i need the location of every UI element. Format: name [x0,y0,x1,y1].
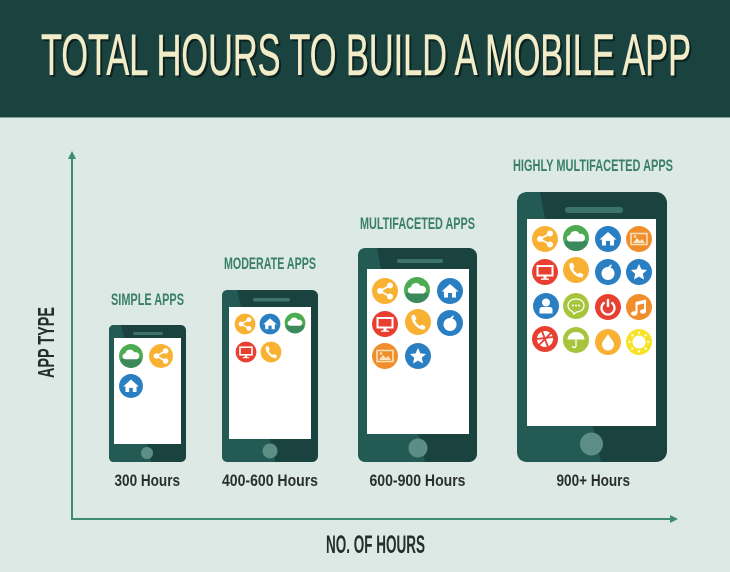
icons: highly multifaceted apps [532,225,652,355]
y axis arrow [68,151,76,520]
panel: moderate apps [222,255,318,490]
phone: highly multifaceted apps [517,192,667,462]
phone: simple apps [109,325,186,462]
heading: multifaceted apps: MULTIFACETED APPS [360,215,475,233]
icons: simple apps [119,344,173,398]
value: 300 hours: 300 Hours [114,471,180,490]
panel: multifaceted apps [358,215,477,490]
phone: multifaceted apps [358,248,477,462]
x axis label: NO. OF HOURS [326,531,425,559]
y axis label: APP TYPE [33,307,59,378]
heading: simple apps: SIMPLE APPS [111,291,184,309]
header banner [0,0,730,118]
icons: multifaceted apps [372,277,463,369]
value: 900+ hours: 900+ Hours [556,471,630,490]
phone: moderate apps [222,290,318,462]
panel: highly multifaceted apps [513,157,673,490]
x axis arrow [71,515,678,523]
icons: moderate apps [235,313,305,362]
panel: simple apps [109,291,186,490]
value: 600-900 hours: 600-900 Hours [370,471,466,490]
value: 400-600 hours: 400-600 Hours [222,471,318,490]
heading: moderate apps: MODERATE APPS [224,255,316,273]
